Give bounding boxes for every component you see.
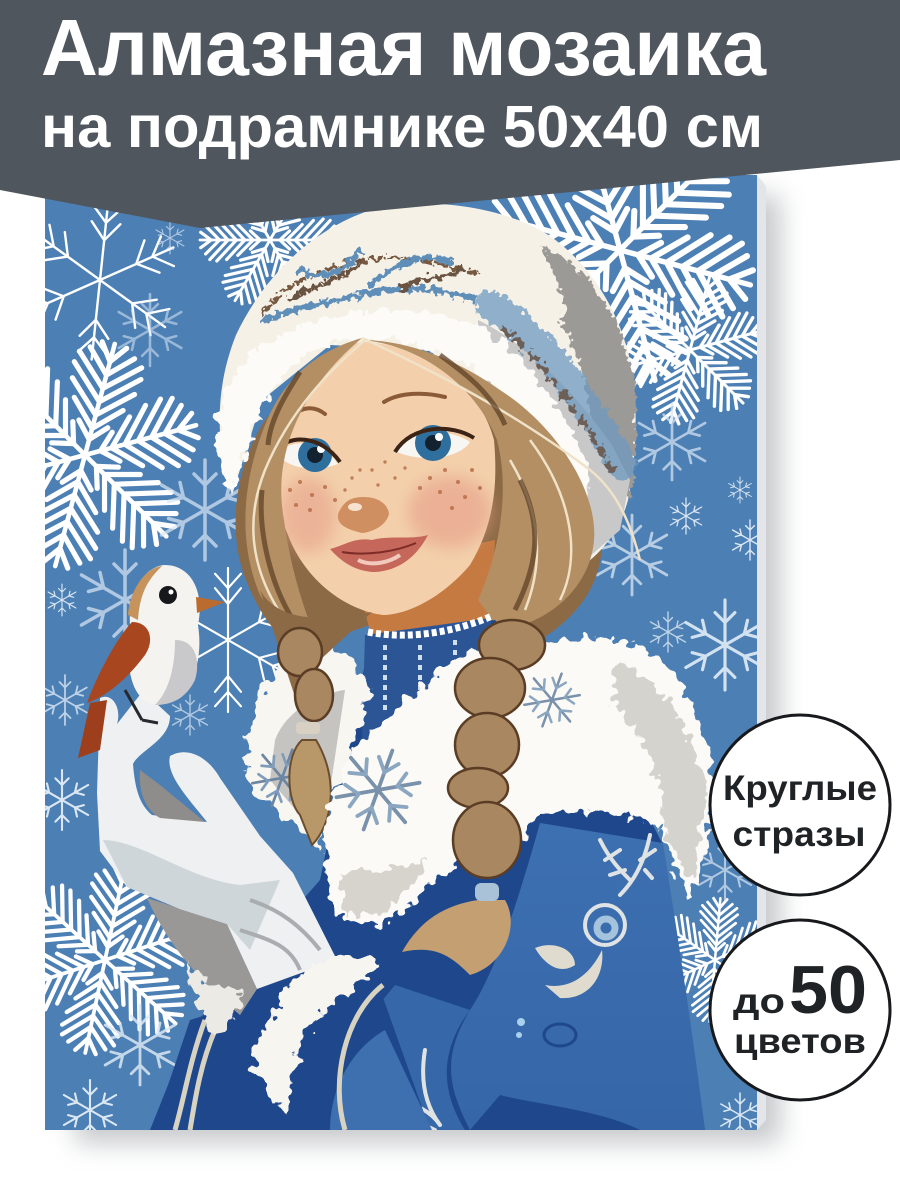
under-hand shadow bbox=[147, 898, 257, 1015]
snowflake pattern bbox=[45, 178, 757, 1130]
badge: up to 50 colours: 50 bbox=[789, 952, 867, 1028]
nose bbox=[338, 497, 389, 533]
hair back bbox=[236, 415, 602, 637]
left eye bbox=[284, 443, 338, 468]
right hat band bbox=[478, 320, 630, 565]
hat bbox=[217, 204, 636, 570]
hat embroidery bbox=[262, 250, 622, 470]
freckles bbox=[288, 460, 482, 512]
subtitle: на подрамнике 50х40 см bbox=[41, 94, 763, 160]
badge: up to 50 colours bbox=[710, 920, 890, 1100]
glove bbox=[97, 691, 337, 989]
canvas side edge and shadow bbox=[75, 175, 780, 1143]
coat bbox=[150, 616, 705, 1130]
eyebrows bbox=[292, 394, 445, 416]
face bbox=[269, 342, 495, 615]
badge: up to 50 colours: цветов bbox=[734, 1022, 866, 1061]
coat centre panel bbox=[384, 985, 470, 1130]
bird bbox=[78, 565, 225, 758]
right fur collar bbox=[325, 637, 714, 925]
mouth bbox=[330, 535, 428, 572]
fur embroidery bbox=[334, 748, 422, 832]
coat sleeve bbox=[451, 823, 705, 1130]
right eye bbox=[397, 433, 470, 458]
cheeks bbox=[280, 477, 336, 553]
right braid bbox=[402, 620, 545, 975]
braid tail bbox=[402, 900, 511, 975]
badge: round rhinestones: стразы bbox=[732, 815, 866, 854]
front hair bbox=[245, 338, 594, 650]
sleeve fur cuffs bbox=[252, 956, 380, 1115]
badge: round rhinestones: Круглые bbox=[723, 769, 877, 808]
left sleeve bbox=[168, 1000, 424, 1112]
left fur collar bbox=[245, 645, 372, 850]
badge: up to 50 colours: до bbox=[733, 982, 785, 1021]
coat ornaments bbox=[395, 835, 655, 1130]
blue background bbox=[45, 175, 757, 1130]
banner bbox=[0, 0, 900, 228]
title: Алмазная мозаика bbox=[41, 3, 766, 92]
sleeve fold bbox=[470, 1095, 640, 1130]
left braid bbox=[260, 590, 372, 845]
sleeve and glove bbox=[97, 691, 432, 1130]
collar bbox=[362, 618, 492, 740]
hair strands bbox=[253, 338, 640, 620]
hat crown bbox=[220, 204, 636, 570]
painted canvas bbox=[45, 175, 757, 1130]
hat shadow bbox=[540, 245, 636, 500]
neck bbox=[365, 540, 495, 634]
badge: round rhinestones bbox=[710, 715, 890, 895]
fur band bbox=[217, 310, 590, 520]
